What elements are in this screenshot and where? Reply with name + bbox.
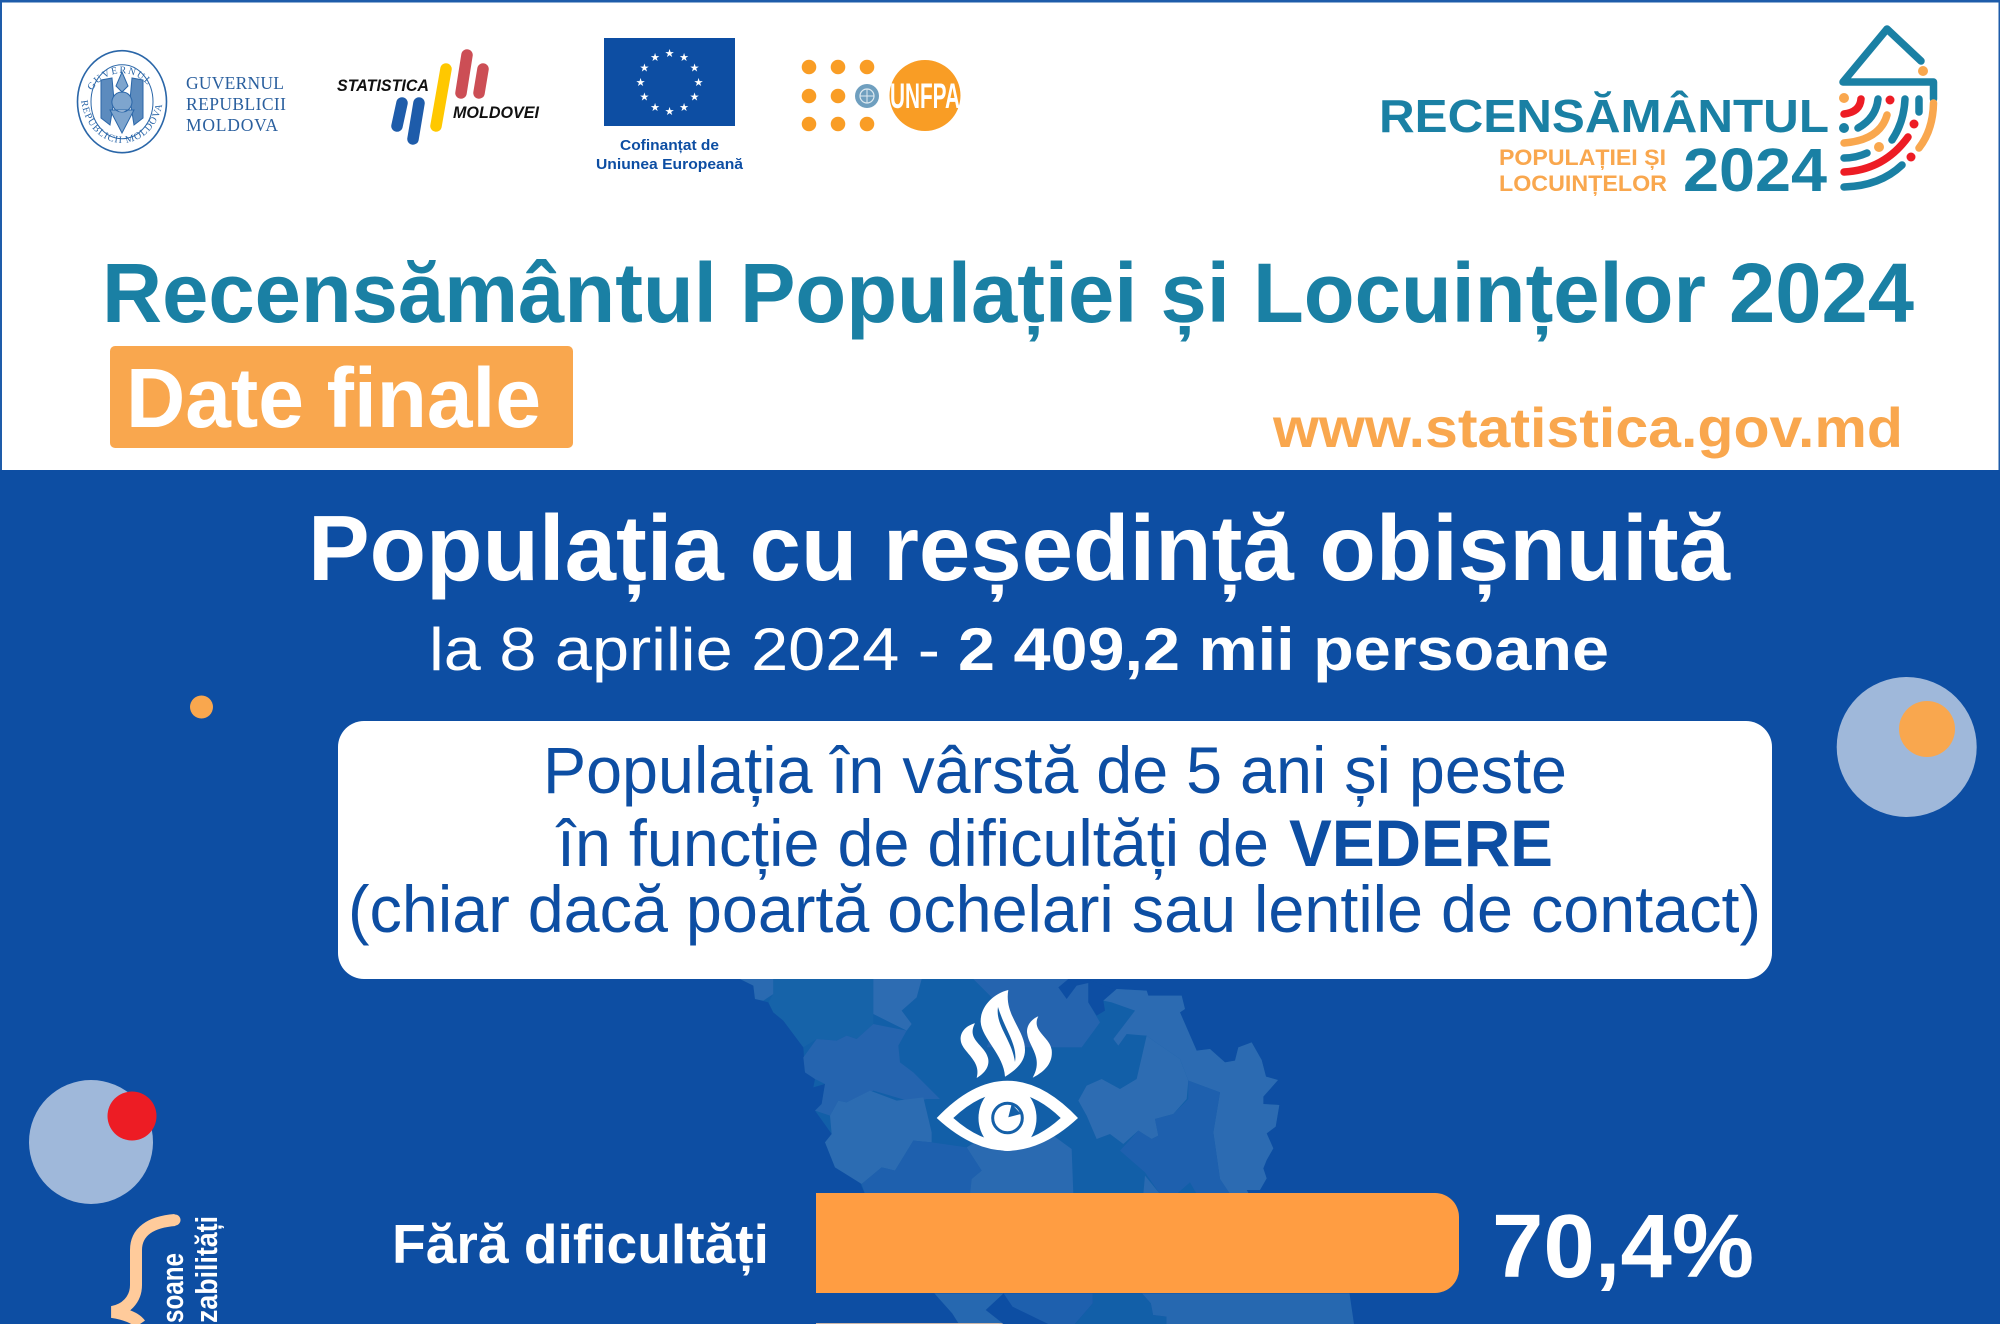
logo: European Union flag: ★: [690, 62, 700, 74]
logo: European Union flag: ★: [694, 77, 704, 89]
logo: Guvernul Republicii Moldova: GUVERNUL: [88, 66, 150, 90]
panel: blue main area: [0, 470, 2000, 1324]
panel: white header: [0, 0, 2000, 470]
decorative orange dot: [190, 696, 213, 718]
subheading: total population: [429, 616, 1609, 683]
bar: no difficulties 70,4%: Fără dificultăți: [392, 1213, 769, 1276]
panel: description box: în funcție de dificultăți de: [555, 806, 1269, 880]
bar: no difficulties 70,4%: 70,4%: [1492, 1197, 1754, 1297]
title: Recensământul Populației și Locuințelor 2024: [102, 246, 1914, 341]
logo: Guvernul Republicii Moldova: [76, 50, 286, 154]
logo: European Union flag: ★: [665, 48, 675, 60]
logo: Recensământul 2024: RECENSĂMÂNTUL: [1379, 90, 1829, 142]
logo: European Union flag: ★: [650, 102, 660, 114]
logo: Statistica Moldovei: STATISTICA: [337, 77, 429, 95]
bracket: persons with disabilities: [112, 1214, 224, 1324]
logo: UNFPA: UNFPA: [890, 77, 960, 116]
logo: European Union flag: [596, 38, 744, 173]
logo: Recensământul 2024: POPULAȚIEI ȘI: [1499, 145, 1666, 170]
map of Moldova background: [740, 979, 1354, 1324]
logo: European Union flag: ★: [679, 102, 689, 114]
decorative circle left: [29, 1080, 156, 1204]
logo: Guvernul Republicii Moldova: GUVERNUL: [186, 73, 284, 93]
decorative circle right: [1837, 677, 1977, 817]
bar: next category top edge: [816, 1323, 1003, 1324]
logo: European Union flag: ★: [639, 62, 649, 74]
subheading: total population: la 8 aprilie 2024 -: [429, 616, 940, 683]
logo: UNFPA: [802, 60, 960, 131]
logo: European Union flag: ★: [650, 52, 660, 64]
bracket: persons with disabilities: zabilități: [189, 1216, 224, 1323]
logo: Recensământul 2024: 2024: [1683, 136, 1827, 204]
logo: European Union flag: ★: [665, 106, 675, 118]
logo: Statistica Moldovei: [337, 55, 539, 139]
logo: European Union flag: Uniunea Europeană: [596, 157, 744, 173]
panel: description box: VEDERE: [1289, 806, 1553, 880]
heading: population: Populația cu reședință obișnuită: [308, 496, 1731, 602]
logo: Guvernul Republicii Moldova: REPUBLICII: [186, 94, 286, 114]
logo: European Union flag: ★: [639, 92, 649, 104]
subheading: total population: 2 409,2 mii persoane: [958, 616, 1609, 683]
website url: www.statistica.gov.md: [1272, 396, 1903, 459]
logo: Guvernul Republicii Moldova: REPUBLICII MOLDOVA: [81, 100, 162, 143]
badge: Date finale: Date finale: [126, 351, 541, 445]
logo: European Union flag: Cofinanțat de: [620, 138, 719, 154]
logo: European Union flag: ★: [690, 92, 700, 104]
logo: Statistica Moldovei: MOLDOVEI: [453, 104, 539, 122]
logo: Recensământul 2024: [1379, 29, 1934, 204]
logo: European Union flag: ★: [679, 52, 689, 64]
bracket: persons with disabilities: soane: [155, 1253, 190, 1323]
panel: description box: (chiar dacă poartă ochelari sau lentile de contact): [348, 872, 1761, 946]
bar: no difficulties 70,4%: [392, 1193, 1754, 1297]
icon: eye with vision waves: [937, 990, 1078, 1151]
panel: description box: Populația în vârstă de 5 ani și peste: [543, 733, 1567, 807]
logo: Guvernul Republicii Moldova: MOLDOVA: [186, 115, 278, 135]
logo: European Union flag: ★: [636, 77, 646, 89]
panel: description box: [338, 721, 1772, 979]
logo: Recensământul 2024: LOCUINȚELOR: [1499, 171, 1667, 196]
